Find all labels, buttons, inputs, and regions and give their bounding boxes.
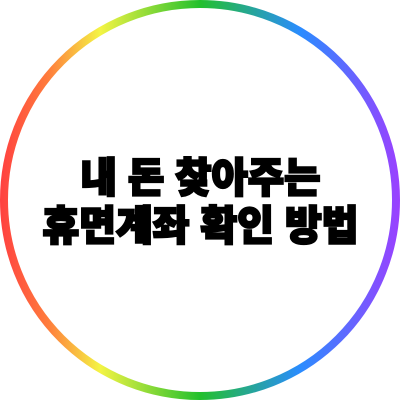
title line 1: 내 돈 찾아주는 <box>80 155 320 201</box>
title line 2: 휴면계좌 확인 방법 <box>42 203 358 249</box>
title <box>42 155 358 249</box>
